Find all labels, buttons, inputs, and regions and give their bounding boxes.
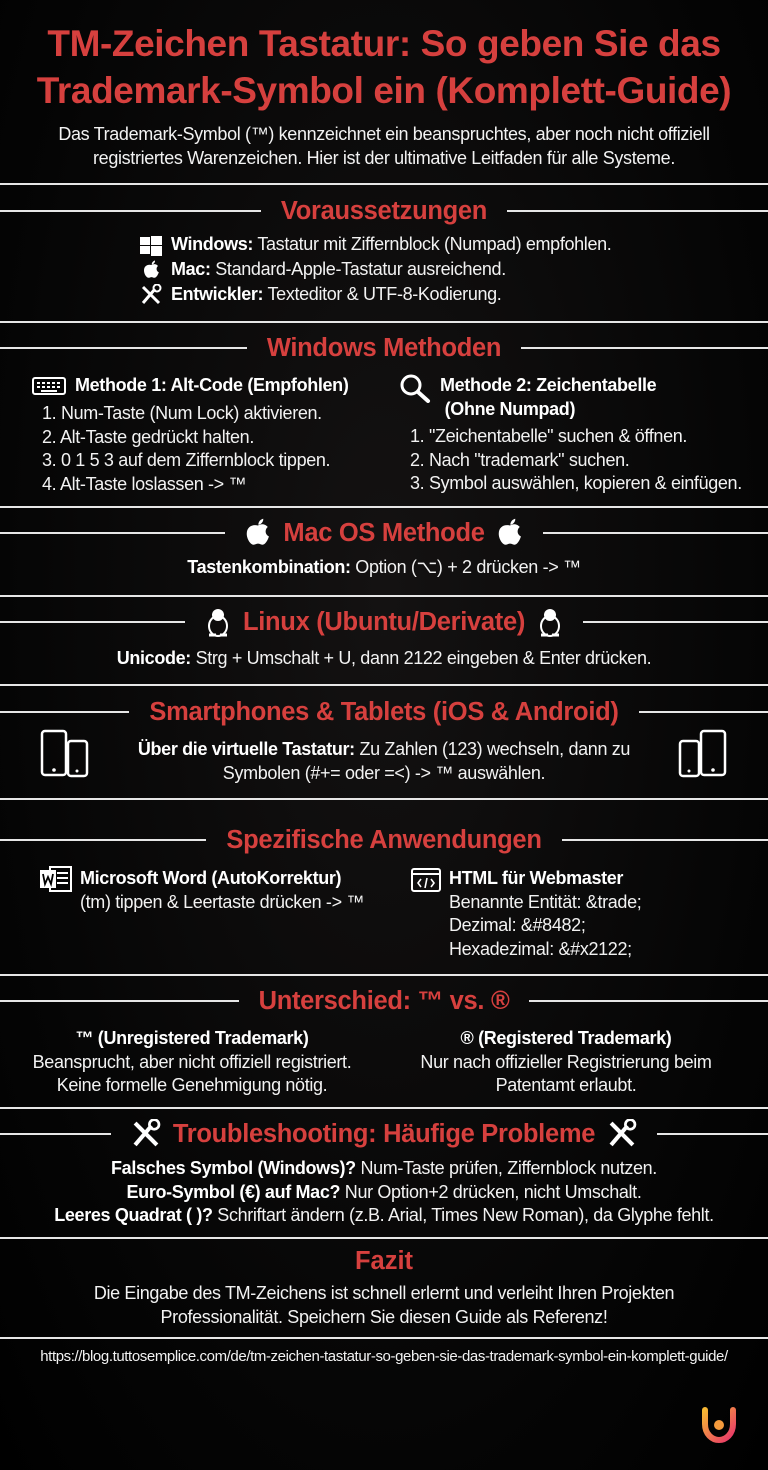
text: troubleshooting list <box>54 1158 714 1225</box>
text: conclusion <box>94 1283 674 1327</box>
panel: registered: Patentamt erlaubt. <box>496 1075 636 1095</box>
icon: keyboard <box>32 377 66 395</box>
icon: magnifier <box>400 374 430 403</box>
heading: method 2 <box>440 375 656 419</box>
text: word <box>80 868 364 912</box>
text: conclusion: Die Eingabe des TM-Zeichens ist schnell erlernt und verleiht Ihren Projekten <box>94 1283 674 1303</box>
panel: tm: Keine formelle Genehmigung nötig. <box>57 1075 327 1095</box>
text: html: Dezimal: &#8482; <box>449 915 585 935</box>
title <box>37 23 731 111</box>
panel: registered: ® (Registered Trademark) <box>461 1028 671 1048</box>
heading: method 2: Methode 2: Zeichentabelle <box>440 375 656 395</box>
text: html <box>449 868 641 958</box>
panel: html <box>411 868 641 958</box>
heading: Spezifische Anwendungen: Spezifische Anwendungen <box>226 826 542 854</box>
title: Trademark-Symbol ein (Komplett-Guide) <box>37 70 731 111</box>
subtitle: Das Trademark-Symbol (™) kennzeichnet ein beanspruchtes, aber noch nicht offiziell <box>58 124 710 144</box>
text: mac: Mac: Standard-Apple-Tastatur ausreichend. <box>171 259 506 279</box>
heading: Troubleshooting: Troubleshooting: Häufige Probleme <box>173 1120 595 1148</box>
icon: logo <box>700 1406 738 1444</box>
list: method 1 steps <box>42 403 330 494</box>
text: mobile <box>138 739 630 783</box>
text: mac shortcut: Tastenkombination: Option (⌥) + 2 drücken -> ™ <box>187 557 581 577</box>
heading: Mac OS: Mac OS Methode <box>283 518 485 546</box>
text: conclusion: Professionalität. Speichern Sie diesen Guide als Referenz! <box>161 1306 607 1326</box>
icon: phones left <box>40 730 88 778</box>
list: method 2 steps <box>410 426 742 493</box>
heading: method 2: (Ohne Numpad) <box>445 398 575 418</box>
text: troubleshooting list: Leeres Quadrat ( )? Schriftart ändern (z.B. Arial, Times New Roman), da Glyphe fehlt. <box>54 1205 714 1225</box>
title: TM-Zeichen Tastatur: So geben Sie das <box>47 23 721 64</box>
icon: windows <box>140 236 162 256</box>
list: method 2 steps: 1. "Zeichentabelle" suchen & öffnen. <box>410 426 687 446</box>
text: word: Microsoft Word (AutoKorrektur) <box>80 868 341 888</box>
icon: apple <box>144 260 159 278</box>
heading: Voraussetzungen: Voraussetzungen <box>281 196 487 224</box>
text: developer: Entwickler: Texteditor & UTF-8-Kodierung. <box>171 284 501 304</box>
heading: Mac OS <box>0 518 768 546</box>
text: source url: https://blog.tuttosemplice.com/de/tm-zeichen-tastatur-so-geben-sie-das-trademark-symbol-ein-komplett-guide/ <box>40 1348 728 1365</box>
list: method 1 steps: 4. Alt-Taste loslassen -> ™ <box>42 474 246 494</box>
icon: phones right <box>678 730 726 778</box>
list: method 2 steps: 3. Symbol auswählen, kopieren & einfügen. <box>410 473 742 493</box>
panel: tm <box>33 1028 351 1095</box>
icon: tools <box>142 284 162 304</box>
heading: Windows Methoden: Windows Methoden <box>267 334 501 362</box>
list: method 1 steps: 3. 0 1 5 3 auf dem Ziffernblock tippen. <box>42 450 330 470</box>
text: mobile: Über die virtuelle Tastatur: Zu Zahlen (123) wechseln, dann zu <box>138 739 630 759</box>
heading: Troubleshooting <box>0 1119 768 1148</box>
text: html: Hexadezimal: &#x2122; <box>449 938 632 958</box>
panel: word <box>40 866 364 912</box>
subtitle <box>58 124 710 168</box>
text: troubleshooting list: Euro-Symbol (€) auf Mac? Nur Option+2 drücken, nicht Umschalt. <box>127 1182 641 1202</box>
heading: Unterschied: Unterschied: ™ vs. ® <box>259 986 509 1014</box>
text: linux unicode: Unicode: Strg + Umschalt + U, dann 2122 eingeben & Enter drücken. <box>117 648 651 668</box>
list: method 1 steps: 1. Num-Taste (Num Lock) aktivieren. <box>42 403 322 423</box>
text: troubleshooting list: Falsches Symbol (Windows)? Num-Taste prüfen, Ziffernblock nutzen. <box>111 1158 657 1178</box>
heading: Linux <box>0 608 768 637</box>
panel: method 1 <box>32 375 348 494</box>
text: mobile: Symbolen (#+= oder =<) -> ™ auswählen. <box>223 762 545 782</box>
subtitle: registriertes Warenzeichen. Hier ist der ultimative Leitfaden für alle Systeme. <box>93 148 675 168</box>
panel: registered <box>420 1028 712 1095</box>
panel: method 2 <box>400 374 742 493</box>
panel: registered: Nur nach offizieller Registrierung beim <box>420 1052 712 1072</box>
list: method 1 steps: 2. Alt-Taste gedrückt halten. <box>42 426 254 446</box>
text: html: HTML für Webmaster <box>449 868 623 888</box>
heading: method 1: Methode 1: Alt-Code (Empfohlen) <box>75 375 348 395</box>
heading: Smartphones: Smartphones & Tablets (iOS & Android) <box>149 698 619 726</box>
list: method 2 steps: 2. Nach "trademark" suchen. <box>410 450 629 470</box>
icon: code window <box>411 868 441 892</box>
panel: prerequisites <box>140 234 611 304</box>
panel: tm: Beansprucht, aber nicht offiziell registriert. <box>33 1052 351 1072</box>
text: windows: Windows: Tastatur mit Ziffernblock (Numpad) empfohlen. <box>171 234 611 254</box>
heading: Linux: Linux (Ubuntu/Derivate) <box>243 608 525 636</box>
text: html: Benannte Entität: &trade; <box>449 892 641 912</box>
heading: Fazit: Fazit <box>355 1247 413 1275</box>
panel: tm: ™ (Unregistered Trademark) <box>76 1028 308 1048</box>
icon: word <box>40 866 72 892</box>
text: word: (tm) tippen & Leertaste drücken -> ™ <box>80 892 364 912</box>
